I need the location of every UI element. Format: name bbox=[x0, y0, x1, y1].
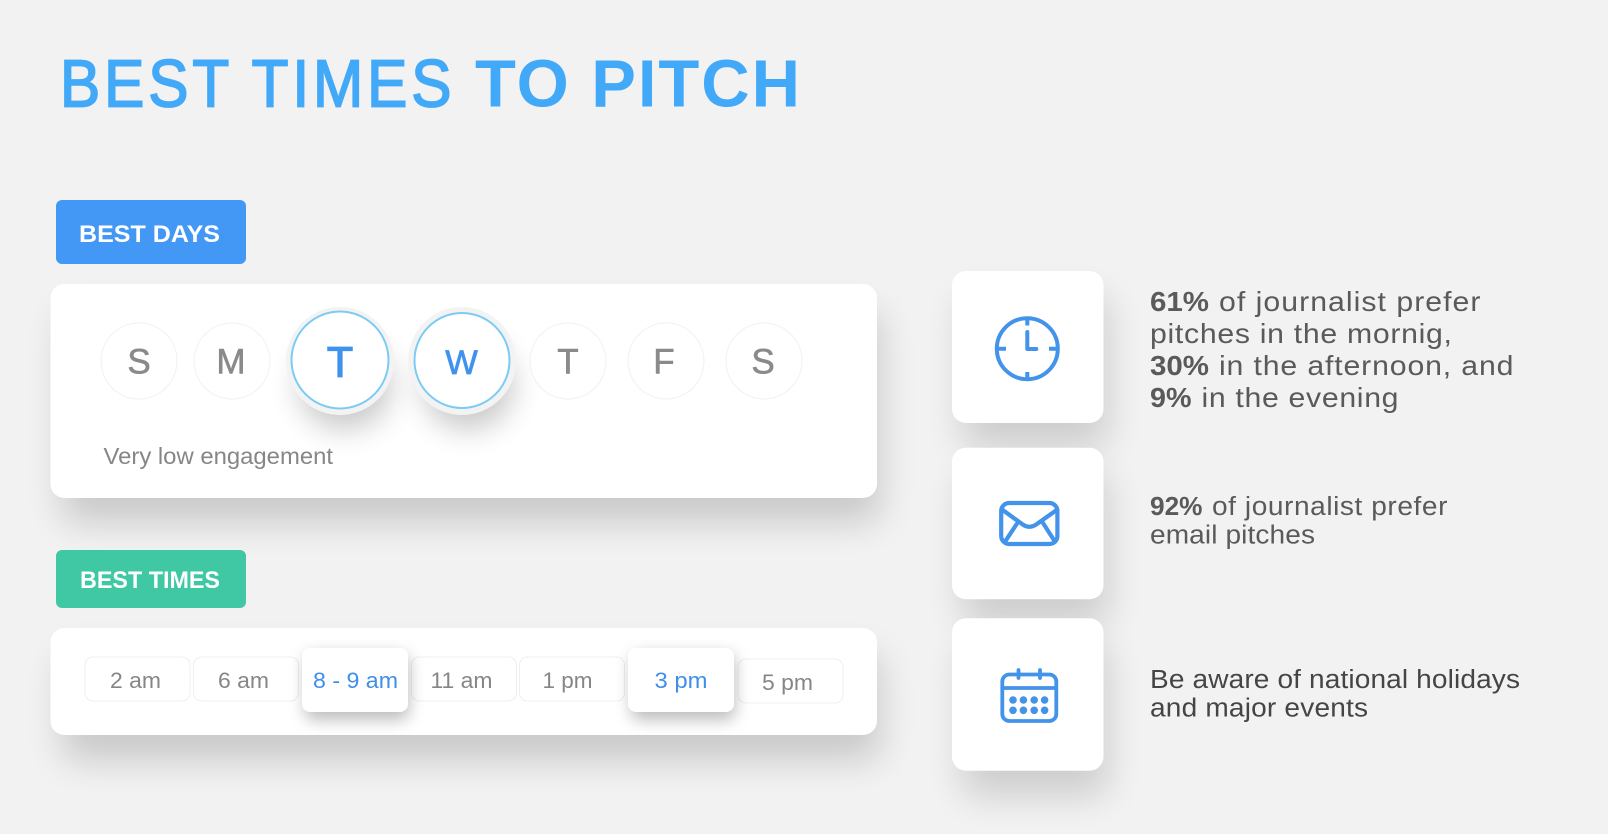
icon: calendar bbox=[1002, 670, 1056, 721]
badge: best times: BEST TIMES bbox=[80, 567, 220, 594]
day: Wednesday highlighted: W bbox=[445, 344, 478, 382]
badge: best days: BEST DAYS bbox=[79, 221, 220, 248]
text: time of day stats: 61% bbox=[1150, 286, 1209, 317]
text: time of day stats: in the evening bbox=[1202, 383, 1399, 414]
day: Friday: F bbox=[653, 342, 675, 382]
chip: 5 pm bbox=[738, 659, 843, 703]
text: time of day stats: of journalist prefer bbox=[1219, 287, 1481, 318]
chip: 3 pm highlighted: 3 pm bbox=[654, 668, 708, 693]
tile: clock bbox=[952, 271, 1108, 448]
day: Thursday: T bbox=[557, 342, 579, 382]
panel: best times bbox=[50, 628, 880, 760]
text: time of day stats: 30% bbox=[1150, 350, 1209, 381]
badge: best times bbox=[56, 550, 246, 608]
chip: 1 pm bbox=[520, 657, 624, 701]
icon: clock bbox=[996, 318, 1058, 380]
text: time of day stats: 9% bbox=[1150, 382, 1192, 413]
tile: calendar bbox=[952, 618, 1108, 796]
chip: 3 pm highlighted bbox=[628, 648, 735, 720]
chip: 5 pm: 5 pm bbox=[762, 670, 813, 695]
day: Sunday: S bbox=[127, 342, 151, 382]
title: TO PITCH bbox=[475, 46, 800, 122]
day: Monday: M bbox=[216, 342, 246, 382]
day: Wednesday highlighted bbox=[408, 307, 516, 429]
title bbox=[60, 46, 800, 122]
chip: 6 am: 6 am bbox=[218, 668, 269, 693]
text: time of day stats: pitches in the mornig, bbox=[1150, 319, 1452, 350]
day: Saturday: S bbox=[751, 342, 775, 382]
text: holidays note bbox=[1150, 665, 1520, 722]
tile: envelope bbox=[952, 448, 1108, 625]
text: time of day stats bbox=[1150, 286, 1513, 414]
text: email stat bbox=[1150, 491, 1447, 549]
caption: engagement: Very low engagement bbox=[104, 443, 334, 469]
icon: envelope bbox=[1001, 503, 1057, 544]
chip: 11 am bbox=[412, 657, 516, 701]
chip: 2 am: 2 am bbox=[110, 668, 161, 693]
chip: 8 - 9 am highlighted bbox=[302, 648, 409, 720]
text: holidays note: and major events bbox=[1150, 693, 1368, 722]
badge: best days bbox=[56, 200, 246, 264]
chip: 2 am bbox=[85, 657, 190, 701]
title: BEST TIMES bbox=[60, 46, 452, 121]
day: Friday bbox=[628, 323, 704, 399]
chip: 11 am: 11 am bbox=[430, 668, 492, 693]
day: Monday bbox=[194, 323, 270, 399]
day: Saturday bbox=[726, 323, 802, 399]
text: holidays note: Be aware of national holidays bbox=[1150, 665, 1520, 694]
day: Sunday bbox=[101, 323, 177, 399]
chip: 1 pm: 1 pm bbox=[542, 668, 592, 693]
chip: 8 - 9 am highlighted: 8 - 9 am bbox=[313, 668, 398, 693]
day: Tuesday highlighted bbox=[286, 307, 394, 429]
text: email stat: of journalist prefer bbox=[1212, 492, 1447, 521]
day: Thursday bbox=[530, 323, 606, 399]
text: email stat: email pitches bbox=[1150, 520, 1315, 549]
chip: 6 am bbox=[194, 657, 298, 701]
text: email stat: 92% bbox=[1150, 491, 1202, 521]
day: Tuesday highlighted: T bbox=[327, 338, 353, 386]
panel: best days bbox=[50, 284, 880, 522]
text: time of day stats: in the afternoon, and bbox=[1219, 351, 1513, 382]
